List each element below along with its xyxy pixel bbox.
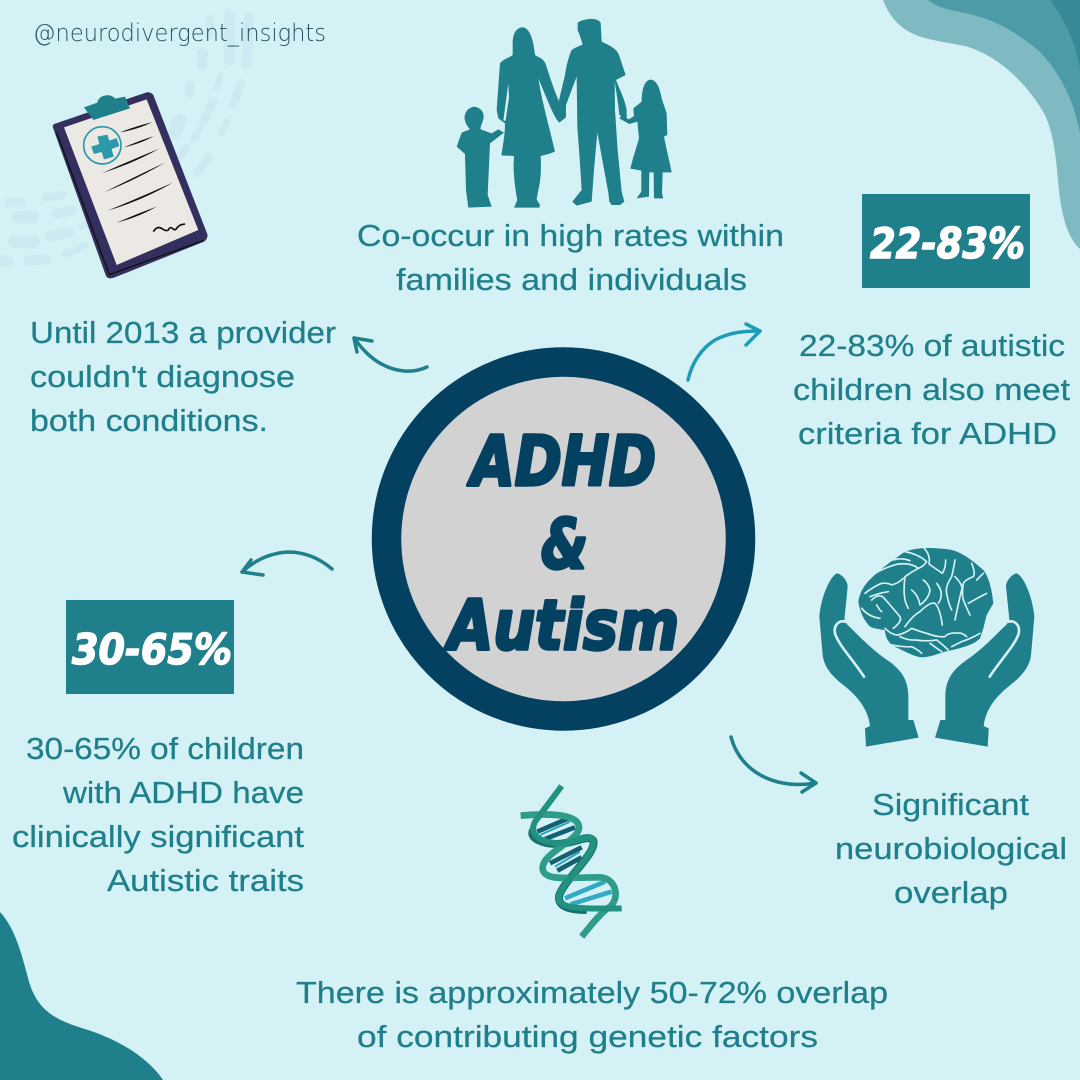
text: neurobiological overlap: Significant (872, 787, 1029, 822)
left hand (819, 573, 919, 747)
text: until 2013 (30, 315, 336, 438)
brain (858, 547, 993, 657)
text: 30-65% of children: with ADHD have (62, 775, 304, 810)
right hand (935, 573, 1034, 747)
text: 30-65% of children: clinically significant (12, 819, 304, 854)
text: until 2013: both conditions. (30, 403, 268, 438)
center title (444, 422, 679, 666)
center circle (386, 362, 740, 716)
text: neurobiological overlap: overlap (894, 875, 1008, 910)
mother (497, 27, 566, 208)
icon: DNA helix (521, 786, 622, 937)
boy (457, 107, 504, 208)
handle: @neurodivergent_insights (33, 19, 326, 47)
text: until 2013: Until 2013 a provider (30, 315, 336, 350)
text: neurobiological overlap (835, 787, 1067, 910)
icon: hands holding brain (819, 547, 1034, 747)
arrow: to diagnosis note (354, 338, 427, 371)
stat box: 22-83% (862, 194, 1030, 288)
center title: & (541, 505, 588, 585)
text: co-occur: families and individuals (396, 262, 747, 297)
text: 30-65% of children: 30-65% of children (26, 731, 304, 766)
stat box: 22-83%: 22-83% (870, 219, 1025, 268)
text: 22-83% of autistic children: 22-83% of autistic (799, 328, 1065, 363)
decorative wave: bottom left (0, 912, 163, 1080)
stat box: 30-65% (66, 600, 234, 694)
arrow: to 22-83% note (688, 324, 760, 380)
text: genetic overlap (296, 975, 888, 1054)
text: co-occur: Co-occur in high rates within (357, 218, 784, 253)
center title: Autism (444, 586, 679, 666)
text: 22-83% of autistic children: criteria for ADHD (798, 416, 1057, 451)
girl (619, 80, 672, 198)
center title: ADHD (467, 422, 656, 502)
stat box: 30-65%: 30-65% (72, 625, 232, 674)
father (559, 19, 627, 206)
icon: clipboard (53, 92, 208, 278)
text: co-occur (357, 218, 784, 297)
icon: family silhouette (457, 19, 672, 208)
decorative wave: top right (883, 0, 1080, 249)
text: genetic overlap: There is approximately 50-72% overlap (296, 975, 888, 1010)
text: 22-83% of autistic children: children also meet (793, 372, 1070, 407)
text: neurobiological overlap: neurobiological (835, 831, 1067, 866)
arrow: to neurobiological note (731, 737, 816, 792)
text: 30-65% of children (12, 731, 304, 898)
text: 22-83% of autistic children (793, 328, 1070, 451)
text: 30-65% of children: Autistic traits (107, 863, 304, 898)
arrow: to 30-65% note (242, 552, 332, 575)
text: genetic overlap: of contributing genetic factors (357, 1019, 818, 1054)
text: until 2013: couldn't diagnose (30, 359, 295, 394)
